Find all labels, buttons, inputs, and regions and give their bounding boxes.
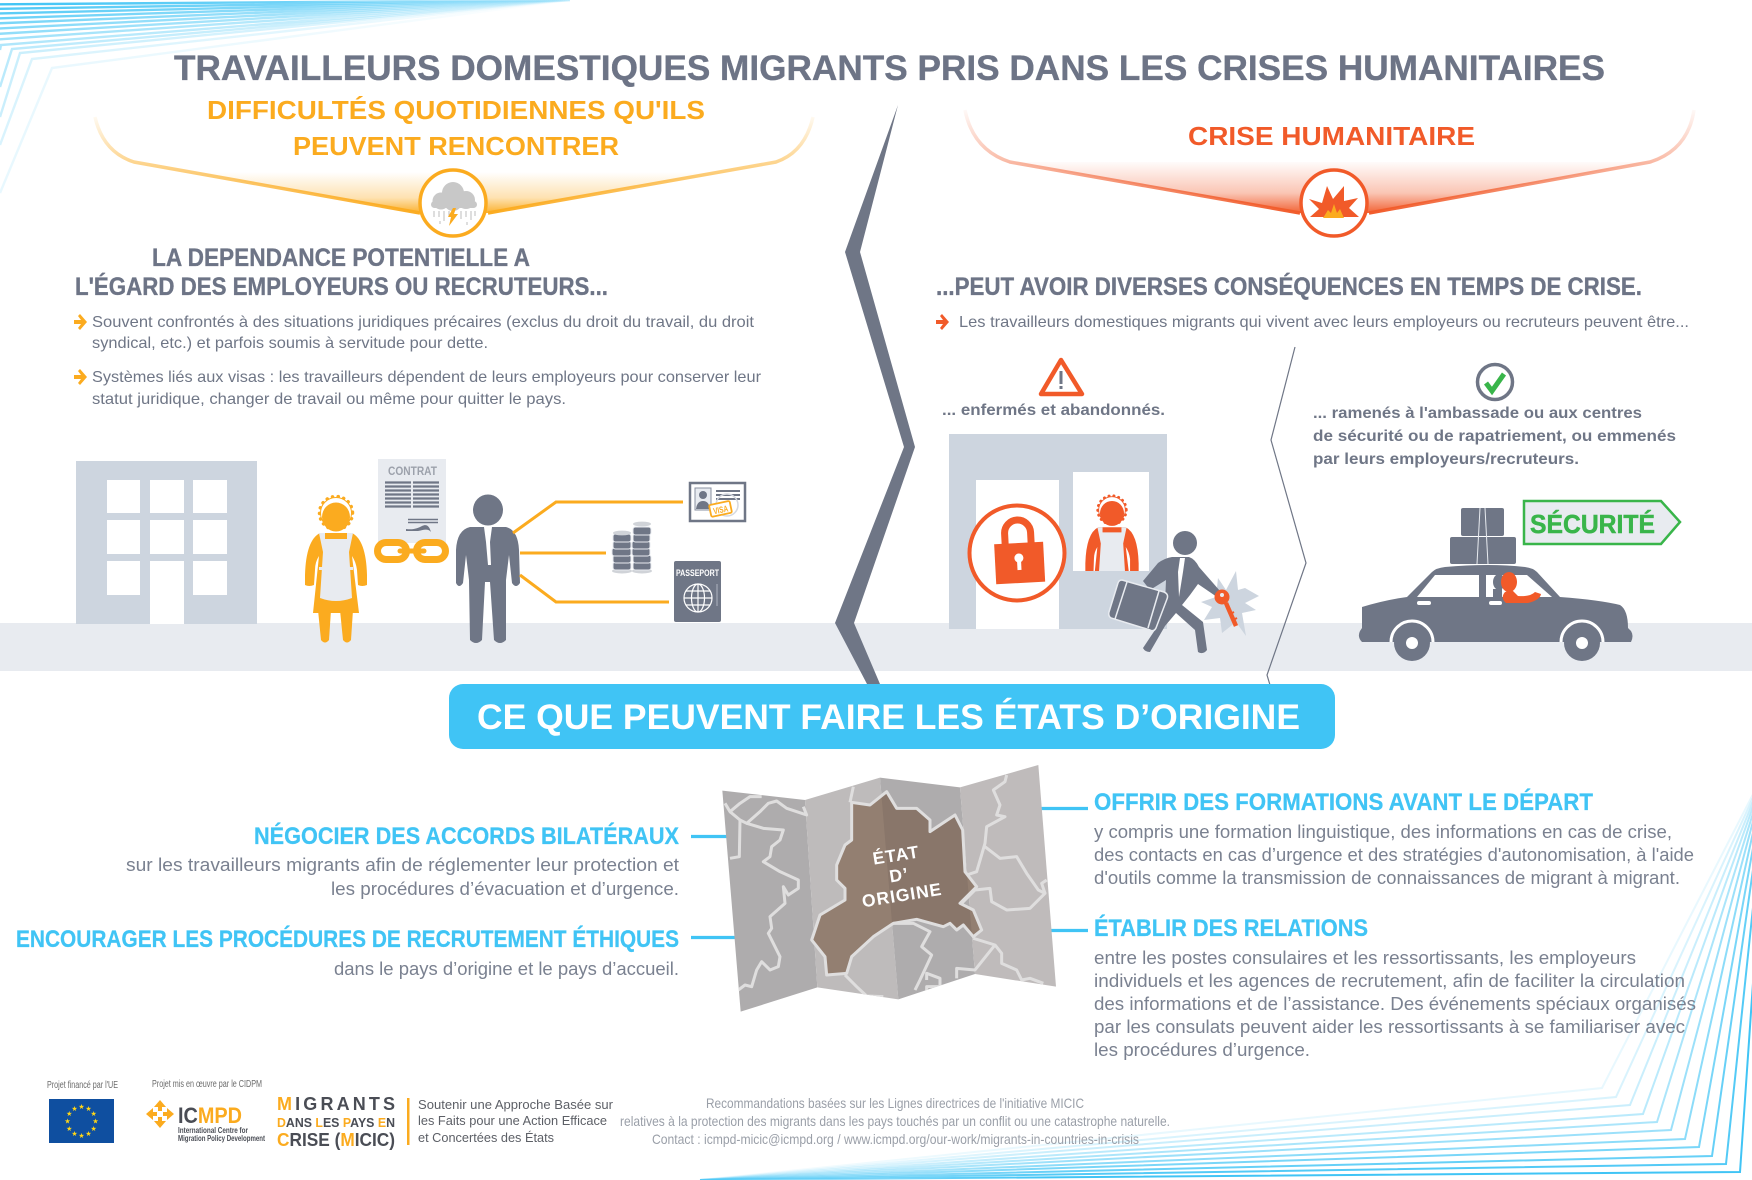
banner: what origin states can do bbox=[449, 684, 1335, 749]
icon: warning triangle bbox=[1041, 360, 1082, 394]
footer: EU funding: ★ bbox=[78, 1103, 85, 1111]
map label bbox=[861, 841, 944, 911]
footer: ICMPD logo: Migration Policy Development bbox=[178, 1134, 265, 1143]
text block: ethical recruitment bbox=[16, 925, 679, 979]
illustration: car with luggage bbox=[1359, 508, 1632, 661]
footer: MICIC tagline: et Concertées des États bbox=[418, 1130, 554, 1145]
footer: recommendations and contact: Recommandations basées sur les Lignes directrices de l'initiative MICIC bbox=[706, 1095, 1084, 1111]
decorative background lines: top left bbox=[0, 0, 570, 193]
central zigzag divider bbox=[835, 105, 915, 684]
text block: dependency: statut juridique, changer de travail ou même pour quitter le pays. bbox=[92, 391, 566, 408]
text block: ethical recruitment: dans le pays d’origine et le pays d’accueil. bbox=[334, 958, 679, 979]
text block: establish relations: individuels et les agences de recrutement, afin de faciliter la circulation bbox=[1094, 970, 1685, 991]
panel: humanitarian crisis header bbox=[965, 110, 1694, 236]
title: TRAVAILLEURS DOMESTIQUES MIGRANTS PRIS DANS LES CRISES HUMANITAIRES bbox=[174, 49, 1605, 88]
text block: dependency: Systèmes liés aux visas : les travailleurs dépendent de leurs employeurs pour conserver leur bbox=[92, 369, 762, 386]
text block: ethical recruitment: ENCOURAGER LES PROCÉDURES DE RECRUTEMENT ÉTHIQUES bbox=[16, 925, 679, 953]
illustration: fleeing employer with key bbox=[1109, 531, 1259, 653]
footer: MICIC logo bbox=[277, 1094, 410, 1150]
suitcase bbox=[1109, 580, 1168, 631]
caption: returned to embassy: de sécurité ou de rapatriement, ou emmenés bbox=[1313, 428, 1676, 445]
footer: MICIC logo: CRISE (MICIC) bbox=[277, 1130, 395, 1150]
footer: recommendations and contact bbox=[620, 1095, 1170, 1147]
text block: bilateral agreements bbox=[126, 822, 679, 899]
footer: EU funding: ★ bbox=[66, 1125, 72, 1133]
banner shape red bbox=[1010, 162, 1650, 213]
burst bbox=[1201, 571, 1259, 636]
connector lines to map bbox=[691, 808, 1088, 938]
panel: daily difficulties header bbox=[95, 95, 813, 236]
luggage bbox=[1461, 508, 1504, 536]
text block: establish relations: entre les postes consulaires et les ressortissants, les employeurs bbox=[1094, 947, 1636, 968]
footer: EU funding: ★ bbox=[91, 1110, 97, 1118]
car body bbox=[1359, 565, 1632, 642]
key bbox=[1214, 590, 1230, 604]
map: state of origin bbox=[722, 765, 1056, 1012]
icon: passport bbox=[674, 561, 721, 622]
footer: ICMPD logo: Projet mis en œuvre par le CIDPM bbox=[152, 1079, 262, 1090]
heading: DIFFICULTÉS QUOTIDIENNES QU'ILS bbox=[207, 95, 705, 125]
text block: bilateral agreements: NÉGOCIER DES ACCORDS BILATÉRAUX bbox=[254, 822, 679, 850]
footer: EU funding: ★ bbox=[85, 1105, 92, 1113]
text block: establish relations: les procédures d’urgence. bbox=[1094, 1039, 1310, 1060]
text block: establish relations: ÉTABLIR DES RELATIONS bbox=[1094, 914, 1368, 942]
footer: MICIC tagline: les Faits pour une Action Efficace bbox=[418, 1113, 607, 1128]
map label: D’ bbox=[888, 864, 910, 886]
sign: sécurité: SÉCURITÉ bbox=[1530, 509, 1655, 539]
footer: MICIC logo: DANS LES PAYS EN bbox=[277, 1115, 395, 1130]
text block: pre-departure training: OFFRIR DES FORMATIONS AVANT LE DÉPART bbox=[1094, 788, 1593, 816]
wheels bbox=[1391, 621, 1603, 642]
text block: pre-departure training bbox=[1094, 788, 1694, 888]
text block: dependency: syndical, etc.) et parfois soumis à servitude pour dette. bbox=[92, 335, 488, 352]
caption: returned to embassy bbox=[1313, 405, 1676, 468]
text block: consequences: ...PEUT AVOIR DIVERSES CONSÉQUENCES EN TEMPS DE CRISE. bbox=[936, 272, 1642, 301]
map label: ÉTAT bbox=[871, 841, 921, 869]
banner: what origin states can do: CE QUE PEUVENT FAIRE LES ÉTATS D’ORIGINE bbox=[477, 697, 1300, 737]
footer: EU funding: ★ bbox=[64, 1118, 71, 1126]
caption: returned to embassy: ... ramenés à l'ambassade ou aux centres bbox=[1313, 405, 1642, 422]
footer: EU funding: ★ bbox=[71, 1130, 78, 1138]
bullet arrow bbox=[74, 369, 87, 385]
footer: EU funding: ★ bbox=[92, 1118, 99, 1126]
text block: bilateral agreements: sur les travailleurs migrants afin de réglementer leur protection et bbox=[126, 854, 679, 875]
text block: establish relations bbox=[1094, 914, 1696, 1060]
decorative background lines: bottom right bbox=[700, 765, 1752, 1180]
footer: recommendations and contact: relatives à la protection des migrants dans les pays touchés par un conflit ou une catastrophe naturelle. bbox=[620, 1113, 1170, 1129]
footer: EU funding: ★ bbox=[78, 1132, 85, 1140]
text block: pre-departure training: des contacts en cas d’urgence et des stratégies d'autonomisation, à l'aide bbox=[1094, 844, 1694, 865]
text block: consequences bbox=[936, 272, 1689, 331]
text block: establish relations: des informations et de l’assistance. Des événements spéciaux organisés bbox=[1094, 993, 1696, 1014]
footer: ICMPD logo: International Centre for bbox=[178, 1126, 248, 1135]
footer: EU funding: ★ bbox=[66, 1110, 72, 1118]
icon: passport: PASSEPORT bbox=[676, 568, 719, 578]
footer: recommendations and contact: Contact : icmpd-micic@icmpd.org / www.icmpd.org/our-work/migrants-in-countries-in-crisis bbox=[652, 1131, 1139, 1147]
footer: ICMPD logo: ICMPD bbox=[178, 1103, 242, 1128]
illustration: employer man bbox=[456, 494, 520, 643]
caption: returned to embassy: par leurs employeurs/recruteurs. bbox=[1313, 451, 1579, 468]
text block: pre-departure training: y compris une formation linguistique, des informations en cas de crise, bbox=[1094, 821, 1672, 842]
icon: visa card bbox=[690, 483, 745, 521]
bullet arrow bbox=[936, 314, 949, 330]
connector lines bbox=[513, 502, 683, 602]
map label: ORIGINE bbox=[861, 879, 944, 911]
text block: dependency: L'ÉGARD DES EMPLOYEURS OU RECRUTEURS... bbox=[75, 272, 608, 301]
footer: MICIC logo: MIGRANTS bbox=[277, 1094, 395, 1114]
icon: check mark bbox=[1478, 364, 1512, 400]
ground band bbox=[0, 623, 1752, 671]
icon: stacks of coins bbox=[612, 522, 652, 574]
text block: consequences: Les travailleurs domestiques migrants qui vivent avec leurs employeurs ou recruteurs peuvent être... bbox=[959, 314, 1689, 331]
footer: MICIC tagline bbox=[418, 1097, 614, 1145]
caption: locked and abandoned: ... enfermés et abandonnés. bbox=[942, 402, 1165, 419]
heading: CRISE HUMANITAIRE bbox=[1188, 121, 1475, 151]
illustration: chain link bbox=[378, 542, 446, 560]
icon: explosion bbox=[1301, 170, 1367, 236]
footer: EU funding: ★ bbox=[85, 1130, 92, 1138]
icon: visa card: VISA bbox=[712, 503, 729, 516]
icon: storm cloud bbox=[420, 170, 486, 236]
text block: pre-departure training: d'outils comme la transmission de connaissances de migrant à migrant. bbox=[1094, 867, 1680, 888]
text block: dependency: Souvent confrontés à des situations juridiques précaires (exclus du droit du travail, du droit bbox=[92, 314, 755, 331]
text block: establish relations: par les consulats peuvent aider les ressortissants à se familiariser avec bbox=[1094, 1016, 1685, 1037]
illustration: maid at window bbox=[1085, 494, 1139, 571]
footer: EU funding: ★ bbox=[91, 1125, 97, 1133]
illustration: maid orange bbox=[305, 496, 367, 642]
icon: padlock bbox=[970, 506, 1064, 600]
sign: sécurité bbox=[1524, 501, 1680, 544]
footer: MICIC tagline: Soutenir une Approche Basée sur bbox=[418, 1097, 614, 1112]
illustration: locked building bbox=[949, 434, 1167, 629]
footer: EU funding bbox=[47, 1080, 118, 1143]
illustration: contract: CONTRAT bbox=[388, 464, 438, 478]
thin zigzag divider bbox=[1267, 347, 1306, 705]
illustration: contract bbox=[378, 459, 446, 543]
banner shape orange bbox=[134, 162, 776, 213]
text block: bilateral agreements: les procédures d’évacuation et d’urgence. bbox=[331, 878, 679, 899]
text block: dependency: LA DEPENDANCE POTENTIELLE A bbox=[152, 244, 530, 272]
footer: EU funding: ★ bbox=[71, 1105, 78, 1113]
text block: dependency bbox=[74, 244, 762, 408]
footer: ICMPD logo bbox=[146, 1079, 265, 1143]
footer: EU funding: Projet financé par l'UE bbox=[47, 1080, 118, 1091]
bullet arrow bbox=[74, 314, 87, 330]
driver bbox=[1501, 572, 1541, 603]
icon: four arrows bbox=[146, 1100, 174, 1128]
panel: daily difficulties header: PEUVENT RENCONTRER bbox=[293, 131, 619, 161]
illustration: building left bbox=[76, 461, 257, 624]
